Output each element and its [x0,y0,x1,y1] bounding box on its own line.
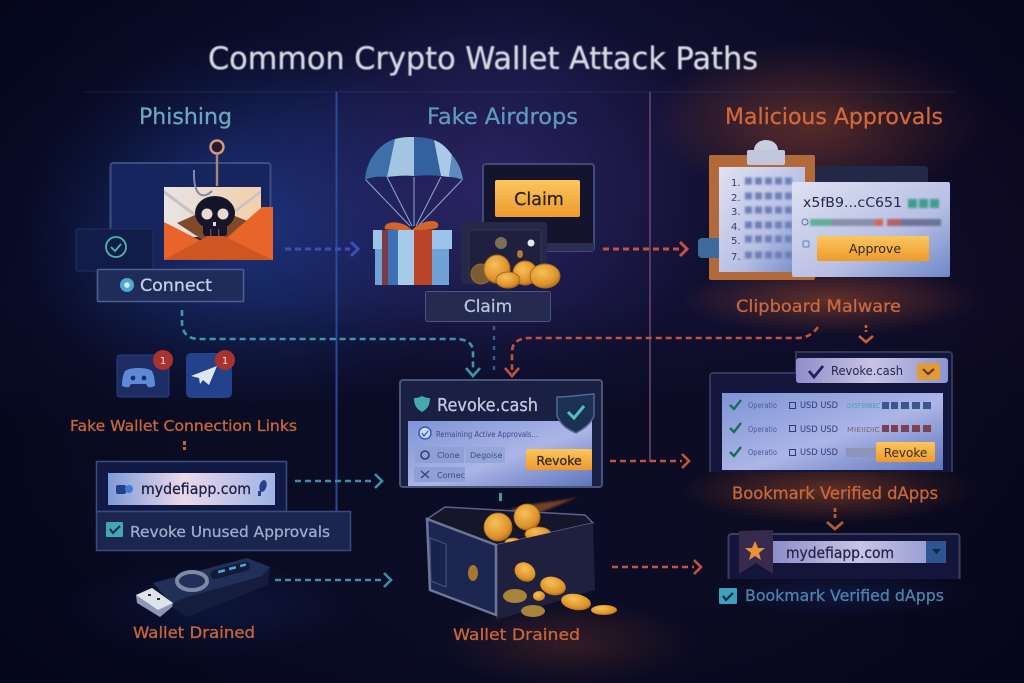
claim screen: Claim [514,190,564,210]
arrow: claim to revoke panel [493,326,495,376]
spilled coins [503,558,617,617]
arrow: wallet to bookmark [612,560,701,574]
panel: malicious approvals illustration [698,140,950,280]
revoke unused approvals box: Revoke Unused Approvals [130,523,330,541]
inner panel: Remaining Active Approvals... [436,430,538,439]
table: USD USD [800,448,838,458]
table: USD USD [800,425,838,435]
clipboard: 3. [731,207,741,218]
inner panel: Revoke [536,453,582,468]
inner panel [408,421,592,486]
table [722,393,943,470]
checkbox: bookmark verified dapps: Bookmark Verified dApps [745,586,944,605]
icon: discord: 1 [160,356,166,367]
icons: discord and telegram [117,350,235,398]
claim screen [483,164,594,251]
table: MIEIIDIC [847,426,880,434]
panel: revoke.cash operations table [710,352,952,472]
approval card: x5fB9...cC651 [803,195,902,211]
big shield [557,394,594,433]
label: bookmark verified dapps orange: Bookmark Verified dApps [732,484,938,504]
label: clipboard malware: Clipboard Malware [736,297,901,317]
arrow: airdrops to approvals [603,242,687,256]
icon: wallet with coins [427,496,617,620]
panel: phishing illustration [76,140,273,302]
title: Common Crypto Wallet Attack Paths [208,41,758,77]
panel: revoke.cash [400,380,602,487]
label: wallet drained center: Wallet Drained [453,625,580,644]
connect button [98,270,244,302]
url bar: phishing site [96,462,286,512]
label: wallet drained left: Wallet Drained [133,623,255,642]
claim label box [426,292,550,322]
arrow: clipboard to table [859,325,873,342]
laptop frame [110,163,270,232]
parachute [365,137,463,226]
check card [76,229,153,271]
clipboard [698,140,815,280]
inner panel: Clone [437,451,460,460]
heading: Phishing: Phishing [139,105,232,130]
revoke unused approvals box [96,512,350,550]
clipboard: 7. [731,252,741,263]
clipboard: 4. [731,222,741,233]
revoke.cash pill: Revoke.cash [831,364,903,378]
skull [195,196,235,236]
arrow: revoke to table [610,454,689,468]
table: Operatio [748,401,777,410]
icon: star bookmark [739,530,773,574]
arrow: clipboard to revoke panel [505,327,818,376]
table: Operatio [748,448,777,457]
clipboard: 5. [731,236,741,247]
heading: Fake Airdrops: Fake Airdrops [427,105,578,130]
arrow: table label to bookmark [827,508,843,529]
gold coins [471,255,560,288]
panel: fake airdrops illustration [365,137,594,322]
icon: telegram: 1 [222,356,228,367]
arrow: url to revoke panel [295,474,382,488]
small arrow under links [183,441,186,450]
panel: bookmark url bar [728,530,960,579]
connect button: Connect [140,276,212,296]
arrow: connect to revoke panel [182,310,480,376]
gift box [373,221,452,285]
revoke.cash pill [796,358,948,383]
inner coins [484,504,551,546]
envelope with skull [164,187,273,260]
table: Operatio [748,425,777,434]
fish hook [194,140,224,195]
heading: Malicious Approvals: Malicious Approvals [725,105,943,130]
wallet safe [461,222,547,284]
inner panel: Cornec [437,471,465,480]
panel: revoke.cash: Revoke.cash [437,396,538,416]
inner panel: Degoise [470,451,502,460]
table: Revoke [884,446,927,460]
clipboard: 2. [731,193,741,204]
connector: revoke to wallet [499,493,502,501]
label: fake wallet connection links: Fake Wallet Connection Links [70,417,297,435]
claim label box: Claim [464,297,512,317]
table: 0X5FB9BEC [847,402,880,410]
approval card [792,166,950,277]
clipboard: 1. [731,178,741,189]
approval card: Approve [849,241,901,256]
arrow: usb to wallet [275,573,391,587]
small shield [414,396,430,412]
table: USD USD [800,401,838,411]
panel: bookmark url bar: mydefiapp.com [786,544,894,562]
url bar: phishing site: mydefiapp.com [141,480,251,498]
icon: usb drive [136,558,270,617]
arrow: phishing to airdrops [285,242,358,256]
